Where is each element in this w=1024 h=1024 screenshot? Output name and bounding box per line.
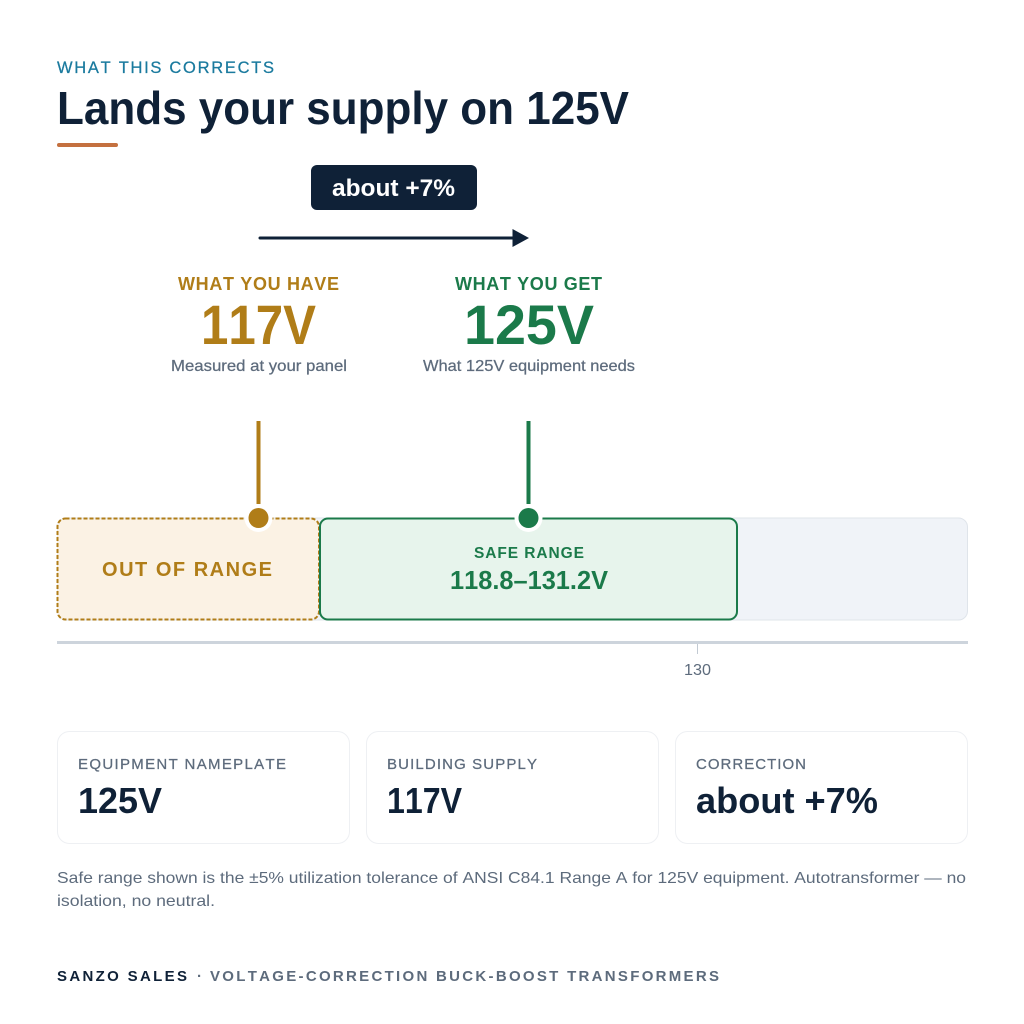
- footnote: [57, 870, 966, 910]
- axis: 130: [684, 662, 711, 679]
- full scale track: [58, 518, 968, 620]
- footer brand line: ·: [197, 968, 202, 985]
- footnote: isolation, no neutral.: [57, 893, 215, 910]
- stat card: correction: about +7%: [696, 780, 878, 821]
- stat card: equipment nameplate: 125V: [78, 780, 162, 821]
- readout: what you get: [423, 274, 635, 375]
- out of range band: [58, 518, 319, 620]
- stat card: equipment nameplate: [58, 732, 350, 844]
- footer brand line: SANZO SALES: [57, 968, 187, 985]
- title: Lands your supply on 125V: [57, 82, 629, 134]
- stat card: building supply: 117V: [387, 780, 462, 821]
- out of range band: OUT OF RANGE: [102, 559, 272, 581]
- readout: what you have: 117V: [201, 293, 316, 356]
- marker: 125V: [514, 421, 542, 532]
- safe range band: 118.8–131.2V: [450, 565, 609, 595]
- stat card: correction: [676, 732, 968, 844]
- readout: what you get: What 125V equipment needs: [423, 358, 635, 375]
- safe range band: SAFE RANGE: [474, 545, 584, 562]
- correction callout pill: [311, 165, 477, 210]
- stat card: building supply: BUILDING SUPPLY: [387, 756, 537, 773]
- correction callout pill: about +7%: [332, 175, 455, 202]
- marker: 117V: [244, 421, 272, 532]
- readout: what you get: 125V: [464, 293, 594, 356]
- title accent rule: [57, 143, 118, 147]
- eyebrow: WHAT THIS CORRECTS: [57, 59, 274, 77]
- readout: what you have: WHAT YOU HAVE: [178, 274, 339, 294]
- safe range band: [320, 518, 737, 620]
- readout: what you have: [171, 274, 347, 375]
- footnote: Safe range shown is the ±5% utilization tolerance of ANSI C84.1 Range A for 125V equipment. Autotransformer — no: [57, 870, 966, 887]
- header: [57, 59, 629, 147]
- arrow: 117V to 125V: [260, 229, 529, 247]
- voltage range chart: [57, 421, 968, 679]
- footer brand line: VOLTAGE-CORRECTION BUCK-BOOST TRANSFORMERS: [210, 968, 719, 985]
- stat card: equipment nameplate: EQUIPMENT NAMEPLATE: [78, 756, 286, 773]
- readout: what you get: WHAT YOU GET: [455, 274, 602, 294]
- axis: [57, 641, 968, 679]
- stat card: building supply: [366, 732, 658, 844]
- readout: what you have: Measured at your panel: [171, 358, 347, 375]
- stat card: correction: CORRECTION: [696, 756, 806, 773]
